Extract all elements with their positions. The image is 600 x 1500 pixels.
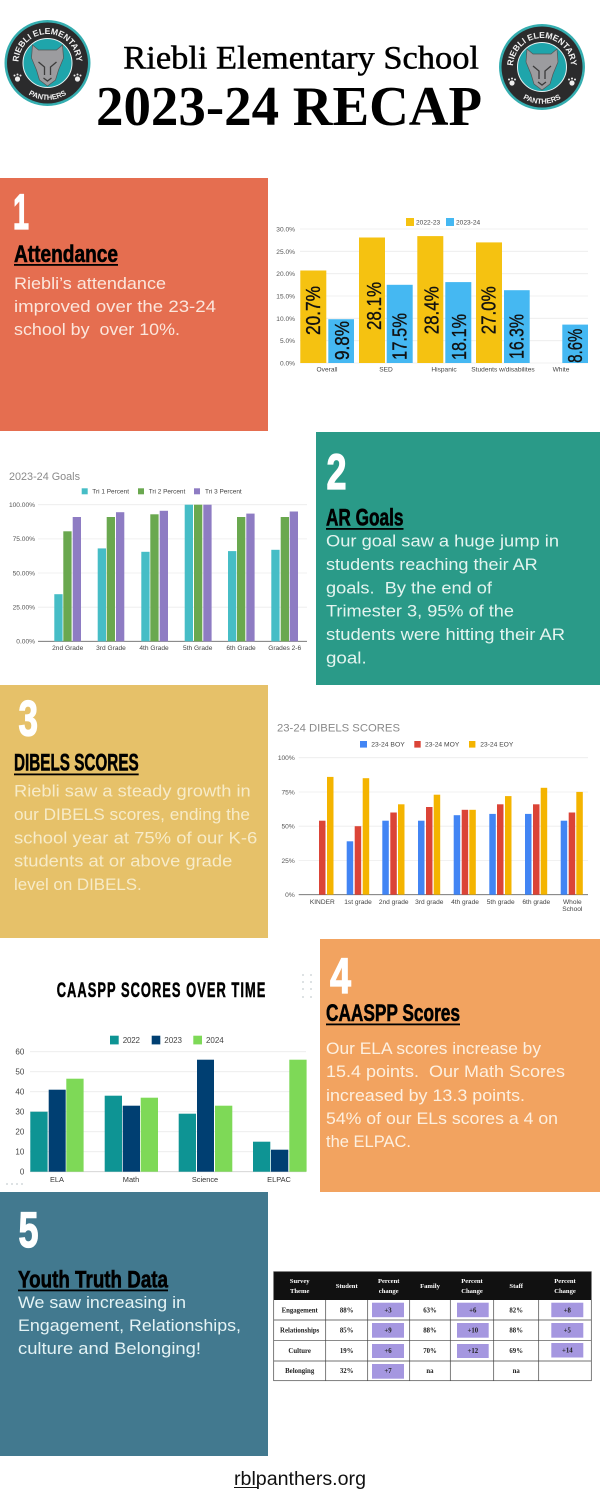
bar chart: attendance by group: 17.5% (390, 313, 412, 360)
bar chart: CAASPP scores over time (15, 978, 307, 1184)
table: Youth Truth survey results: 88% (340, 1308, 354, 1314)
table: Youth Truth survey results: 85% (340, 1328, 354, 1334)
bar chart: attendance by group (276, 218, 588, 374)
bar chart: DIBELS scores: 25% (281, 858, 295, 865)
bar chart: CAASPP scores over time: 2024 (206, 1036, 224, 1045)
table: Youth Truth survey results: +12 (467, 1348, 479, 1355)
bar chart: CAASPP scores over time: 0 (20, 1168, 25, 1177)
table: Youth Truth survey results: Theme (290, 1288, 309, 1295)
bar chart: DIBELS scores: Whole (563, 899, 582, 906)
bar chart: DIBELS scores: School (562, 906, 583, 913)
panel 2 heading: AR Goals (326, 505, 404, 532)
panel 3 number: 3 (18, 691, 38, 747)
bar chart: DIBELS scores: 5th grade (487, 899, 515, 906)
bar chart: AR goals (9, 471, 307, 652)
table: Youth Truth survey results: +7 (384, 1368, 392, 1375)
bar chart: DIBELS scores: 23-24 EOY (480, 742, 514, 749)
bar chart: AR goals: 3rd Grade (96, 645, 126, 652)
panel 4 text: Our ELA scores increase by (326, 1039, 541, 1058)
panel 2 text: Our goal saw a huge jump in (326, 532, 559, 551)
bar chart: AR goals: 4th Grade (139, 645, 169, 652)
bar chart: DIBELS scores: KINDER (310, 899, 335, 906)
panel 5: Youth Truth data (0, 1192, 268, 1456)
panel 4 text: 54% of our ELs scores a 4 on (326, 1109, 558, 1128)
bar chart: attendance by group: 9.8% (332, 321, 354, 360)
panel 2 text: Trimester 3, 95% of the (326, 602, 514, 621)
bar chart: CAASPP scores over time: 10 (15, 1148, 25, 1157)
panel 4 text (326, 1039, 565, 1151)
panel 3 text: Riebli saw a steady growth in (14, 782, 251, 801)
panel 5 text: Engagement, Relationships, (18, 1316, 241, 1335)
panel 4 heading: CAASPP Scores (326, 1000, 460, 1027)
logo: right school badge: PANTHERS (523, 94, 560, 104)
table: Youth Truth survey results: Staff (509, 1283, 524, 1290)
table: Youth Truth survey results: Student (336, 1283, 358, 1290)
panel 3 text (14, 782, 257, 894)
table: Youth Truth survey results: +9 (384, 1328, 392, 1334)
panel 5 heading: Youth Truth Data (18, 1267, 168, 1294)
panel 4 number: 4 (330, 948, 351, 1004)
table: Youth Truth survey results: change (379, 1288, 399, 1295)
bar chart: AR goals: 0.00% (16, 639, 35, 646)
panel 2: AR goals (316, 432, 600, 685)
bar chart: attendance by group: 28.1% (364, 282, 386, 330)
bar chart: DIBELS scores (277, 723, 588, 913)
panel 4 text: 15.4 points. Our Math Scores (326, 1062, 565, 1081)
table: Youth Truth survey results: Culture (288, 1348, 311, 1355)
bar chart: attendance by group: 2022-23 (416, 220, 441, 226)
panel 1 text: improved over the 23-24 (14, 297, 216, 316)
bar chart: attendance by group: Hispanic (431, 366, 457, 374)
bar chart: attendance by group: White (553, 366, 570, 374)
bar chart: CAASPP scores over time: 40 (15, 1088, 25, 1097)
bar chart: attendance by group: 25.0% (276, 249, 295, 256)
panel 1 heading: Attendance (14, 241, 118, 268)
bar chart: DIBELS scores: 6th grade (522, 899, 551, 906)
bar chart: DIBELS scores: 100% (278, 755, 295, 762)
bar chart: DIBELS scores: 75% (281, 789, 295, 796)
table: Youth Truth survey results: Percent (461, 1278, 484, 1285)
table: Youth Truth survey results: 70% (423, 1348, 437, 1355)
bar chart: attendance by group: 5.0% (280, 338, 295, 345)
table: Youth Truth survey results: Relationships (280, 1328, 320, 1334)
table: Youth Truth survey results: 88% (423, 1328, 437, 1334)
bar chart: DIBELS scores: 4th grade (451, 899, 479, 906)
footer: website link: rblpanthers.org (234, 1469, 366, 1490)
panel 3: DIBELS scores (0, 685, 268, 938)
bar chart: attendance by group: 0.0% (280, 360, 295, 368)
table: Youth Truth survey results: +8 (564, 1308, 572, 1314)
table: Youth Truth survey results: +10 (467, 1328, 479, 1334)
bar chart: AR goals: 25.00% (13, 604, 35, 612)
table: Youth Truth survey results: Belonging (285, 1368, 315, 1375)
bar chart: DIBELS scores: 23-24 MOY (425, 742, 460, 749)
table: Youth Truth survey results: +14 (562, 1348, 573, 1354)
panel 3 text: our DIBELS scores, ending the (14, 805, 250, 824)
bar chart: AR goals: 2nd Grade (52, 645, 84, 652)
logo: left school badge (4, 20, 90, 106)
bar chart: CAASPP scores over time: 60 (15, 1048, 25, 1057)
bar chart: DIBELS scores: 0% (285, 892, 295, 899)
bar chart: AR goals: Tri 1 Percent (92, 489, 129, 496)
bar chart: attendance by group: 8.6% (565, 329, 587, 363)
bar chart: AR goals: 100.00% (9, 502, 35, 509)
bar chart: DIBELS scores: 3rd grade (415, 899, 444, 906)
bar chart: attendance by group: 27.0% (479, 286, 501, 334)
table: Youth Truth survey results: 32% (340, 1368, 354, 1375)
bar chart: attendance by group: 20.0% (276, 271, 295, 278)
table: Youth Truth survey results: +6 (384, 1348, 392, 1355)
table: Youth Truth survey results: 19% (340, 1348, 354, 1355)
bar chart: attendance by group: 10.0% (276, 316, 295, 323)
table: Youth Truth survey results: Percent (378, 1278, 400, 1285)
bar chart: AR goals: Grades 2-6 (268, 645, 302, 652)
panel 3 text: level on DIBELS. (14, 875, 142, 894)
bar chart: CAASPP scores over time: Science (192, 1175, 218, 1184)
table: Youth Truth survey results: Family (420, 1283, 441, 1290)
panel 2 number: 2 (326, 444, 346, 500)
panel 2 text: goal. (326, 648, 367, 667)
bar chart: AR goals: 6th Grade (226, 645, 256, 652)
bar chart: attendance by group: 20.7% (303, 286, 325, 335)
bar chart: CAASPP scores over time: 20 (15, 1128, 25, 1137)
logo: left school badge: RIEBLI ELEMENTARY (12, 28, 82, 62)
panel 1: attendance (0, 178, 268, 431)
panel 3 heading (14, 750, 139, 777)
logo: right school badge (499, 24, 585, 110)
table: Youth Truth survey results (274, 1272, 591, 1381)
bar chart: attendance by group: 2023-24 (456, 220, 481, 226)
table: Youth Truth survey results: 88% (509, 1328, 523, 1334)
panel 5 text: We saw increasing in (18, 1293, 186, 1312)
panel 4: CAASPP scores (320, 939, 600, 1192)
bar chart: attendance by group: 18.1% (449, 314, 471, 360)
table: Youth Truth survey results: Change (461, 1288, 483, 1295)
title: 2023-24 recap: 2023-24 RECAP (96, 76, 482, 138)
panel 2 text: students reaching their AR (326, 555, 538, 574)
bar chart: DIBELS scores: 2nd grade (379, 899, 409, 906)
logo: right school badge: RIEBLI ELEMENTARY (507, 32, 577, 66)
panel 2 text: goals. By the end of (326, 578, 492, 597)
bar chart: CAASPP scores over time: 50 (15, 1068, 25, 1077)
table: Youth Truth survey results: Percent (554, 1278, 577, 1285)
table: Youth Truth survey results: +6 (469, 1308, 477, 1314)
table: Youth Truth survey results: Change (554, 1288, 576, 1295)
table: Youth Truth survey results: 63% (423, 1308, 437, 1314)
panel 1 text: Riebli’s attendance (14, 274, 166, 293)
bar chart: AR goals: 50.00% (13, 570, 35, 577)
table: Youth Truth survey results: Engagement (282, 1308, 319, 1314)
title: school name: Riebli Elementary School (123, 40, 479, 76)
bar chart: CAASPP scores over time: ELA (50, 1175, 64, 1184)
bar chart: attendance by group: Overall (317, 366, 338, 374)
bar chart: DIBELS scores: 1st grade (344, 899, 372, 906)
panel 5 text: culture and Belonging! (18, 1339, 201, 1358)
panel 1 text: school by over 10%. (14, 320, 180, 339)
panel 5 text (18, 1293, 241, 1358)
bar chart: attendance by group: Students w/disabilites (471, 366, 535, 374)
bar chart: attendance by group: 16.3% (507, 314, 529, 359)
bar chart: attendance by group: 28.4% (422, 286, 444, 334)
chart title: 2023-24 goals: 2023-24 Goals (9, 471, 80, 483)
bar chart: AR goals: 75.00% (13, 536, 35, 543)
bar chart: DIBELS scores: 23-24 BOY (371, 742, 405, 749)
panel 4 text: increased by 13.3 points. (326, 1086, 525, 1105)
bar chart: AR goals: Tri 3 Percent (205, 489, 242, 496)
bar chart: CAASPP scores over time: Math (123, 1175, 139, 1184)
bar chart: CAASPP scores over time: 2022 (123, 1036, 141, 1045)
bar chart: attendance by group: 15.0% (276, 294, 295, 300)
table: Youth Truth survey results: na (426, 1368, 434, 1375)
panel 1 text (14, 274, 216, 339)
panel 1 number: 1 (13, 184, 29, 240)
panel 3 text: students at or above grade (14, 852, 232, 871)
chart title: 23-24 DIBELS scores: 23-24 DIBELS SCORES (277, 723, 400, 735)
panel 2 text (326, 532, 565, 667)
table: Youth Truth survey results: na (513, 1368, 520, 1375)
panel 3 text: school year at 75% of our K-6 (14, 828, 257, 847)
bar chart: AR goals: Tri 2 Percent (149, 489, 185, 496)
bar chart: AR goals: 5th Grade (183, 645, 213, 652)
bar chart: DIBELS scores: 50% (281, 824, 295, 830)
bar chart: attendance by group: SED (379, 366, 393, 374)
table: Youth Truth survey results: 82% (509, 1308, 523, 1314)
table: Youth Truth survey results: +5 (564, 1328, 572, 1334)
panel 3 heading: DIBELS SCORES (14, 750, 139, 777)
panel 2 text: students were hitting their AR (326, 625, 565, 644)
table: Youth Truth survey results: 69% (509, 1348, 523, 1355)
bar chart: CAASPP scores over time: 2023 (164, 1036, 183, 1045)
bar chart: CAASPP scores over time: 30 (15, 1108, 25, 1117)
table: Youth Truth survey results: +3 (384, 1308, 392, 1314)
bar chart: CAASPP scores over time: ELPAC (267, 1175, 292, 1184)
bar chart: attendance by group: 30.0% (276, 226, 295, 234)
chart title: CAASPP scores over time: CAASPP SCORES OVER TIME (57, 978, 265, 1002)
table: Youth Truth survey results: Survey (290, 1278, 310, 1285)
panel 5 number: 5 (18, 1202, 38, 1258)
logo: left school badge: PANTHERS (28, 90, 66, 100)
panel 4 text: the ELPAC. (326, 1132, 411, 1151)
